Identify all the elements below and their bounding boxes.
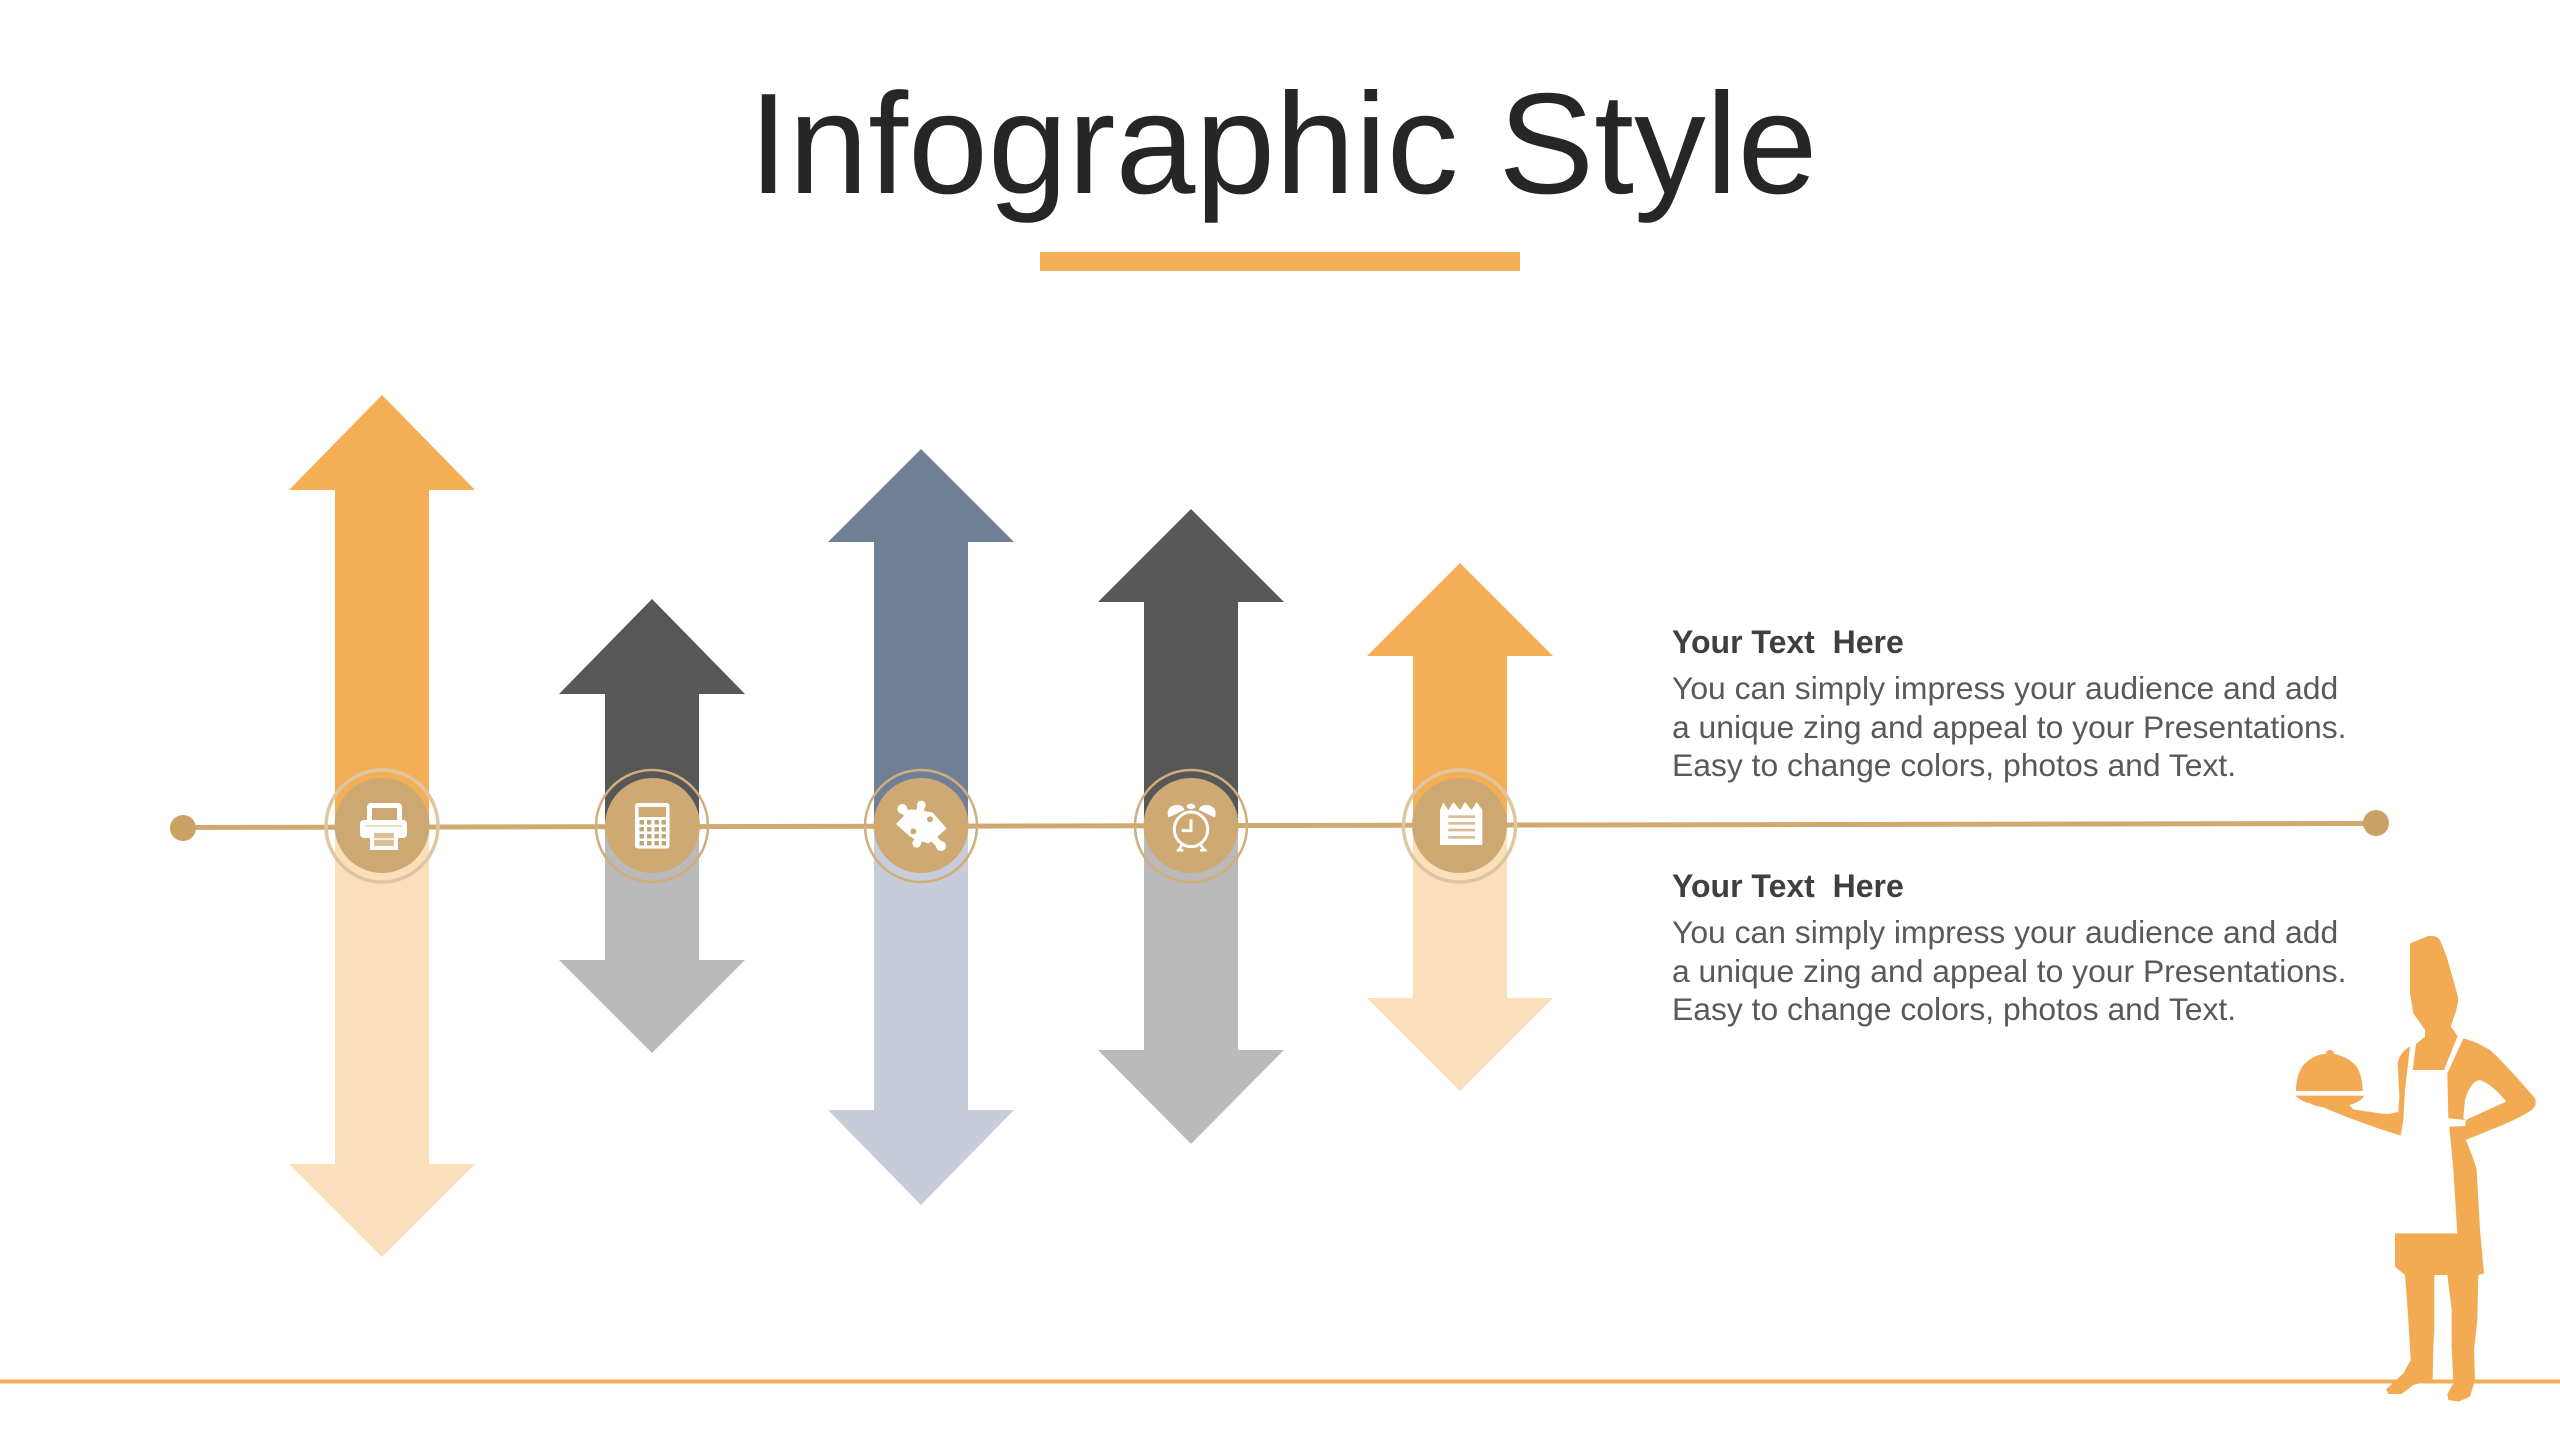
text block 1 [1672,624,2347,783]
arrow 5 up [1367,563,1553,828]
arrow 2 up [559,599,745,828]
title: Infographic Style [749,64,1817,224]
arrow 4 up [1098,509,1284,828]
body 2: Easy to change colors, photos and Text. [1672,991,2236,1027]
arrow 3 down [828,828,1014,1205]
arrow 1 up [289,395,475,828]
node 4: alarm clock [1135,770,1247,882]
body 2: a unique zing and appeal to your Presentations. [1672,953,2347,989]
timeline [170,810,2389,841]
heading 2: Your Text Here [1672,868,1904,904]
heading 1: Your Text Here [1672,624,1904,660]
arrow chart [289,395,1553,1257]
icon: puzzle piece [896,801,947,851]
node 5: notepad [1404,770,1516,882]
icon: notepad [1440,802,1482,845]
body 1: a unique zing and appeal to your Presentations. [1672,709,2347,745]
arm gap [2463,1080,2506,1120]
arrow 2 down [559,828,745,1053]
icon: printer [360,803,407,850]
icon: alarm clock [1168,804,1216,851]
node 3: puzzle [865,770,977,882]
chef left arm and hand [2295,1047,2410,1136]
ground line [0,1380,2560,1384]
cloche [2296,1050,2363,1091]
chef silhouette [2295,936,2536,1402]
node 2: calculator [596,770,708,882]
body 1: You can simply impress your audience and add [1672,670,2338,706]
text block 2 [1672,868,2347,1027]
chef body and legs [2386,1038,2536,1402]
arrow 5 down [1367,828,1553,1091]
arrow 3 up [828,449,1014,828]
body 1: Easy to change colors, photos and Text. [1672,747,2236,783]
icon: calculator [635,803,670,848]
title underline [1040,252,1520,271]
chef head and hat [2410,936,2458,1070]
body 2: You can simply impress your audience and add [1672,914,2338,950]
arrow 4 down [1098,828,1284,1144]
arrow 1 down [289,828,475,1257]
node 1: printer [326,770,438,882]
